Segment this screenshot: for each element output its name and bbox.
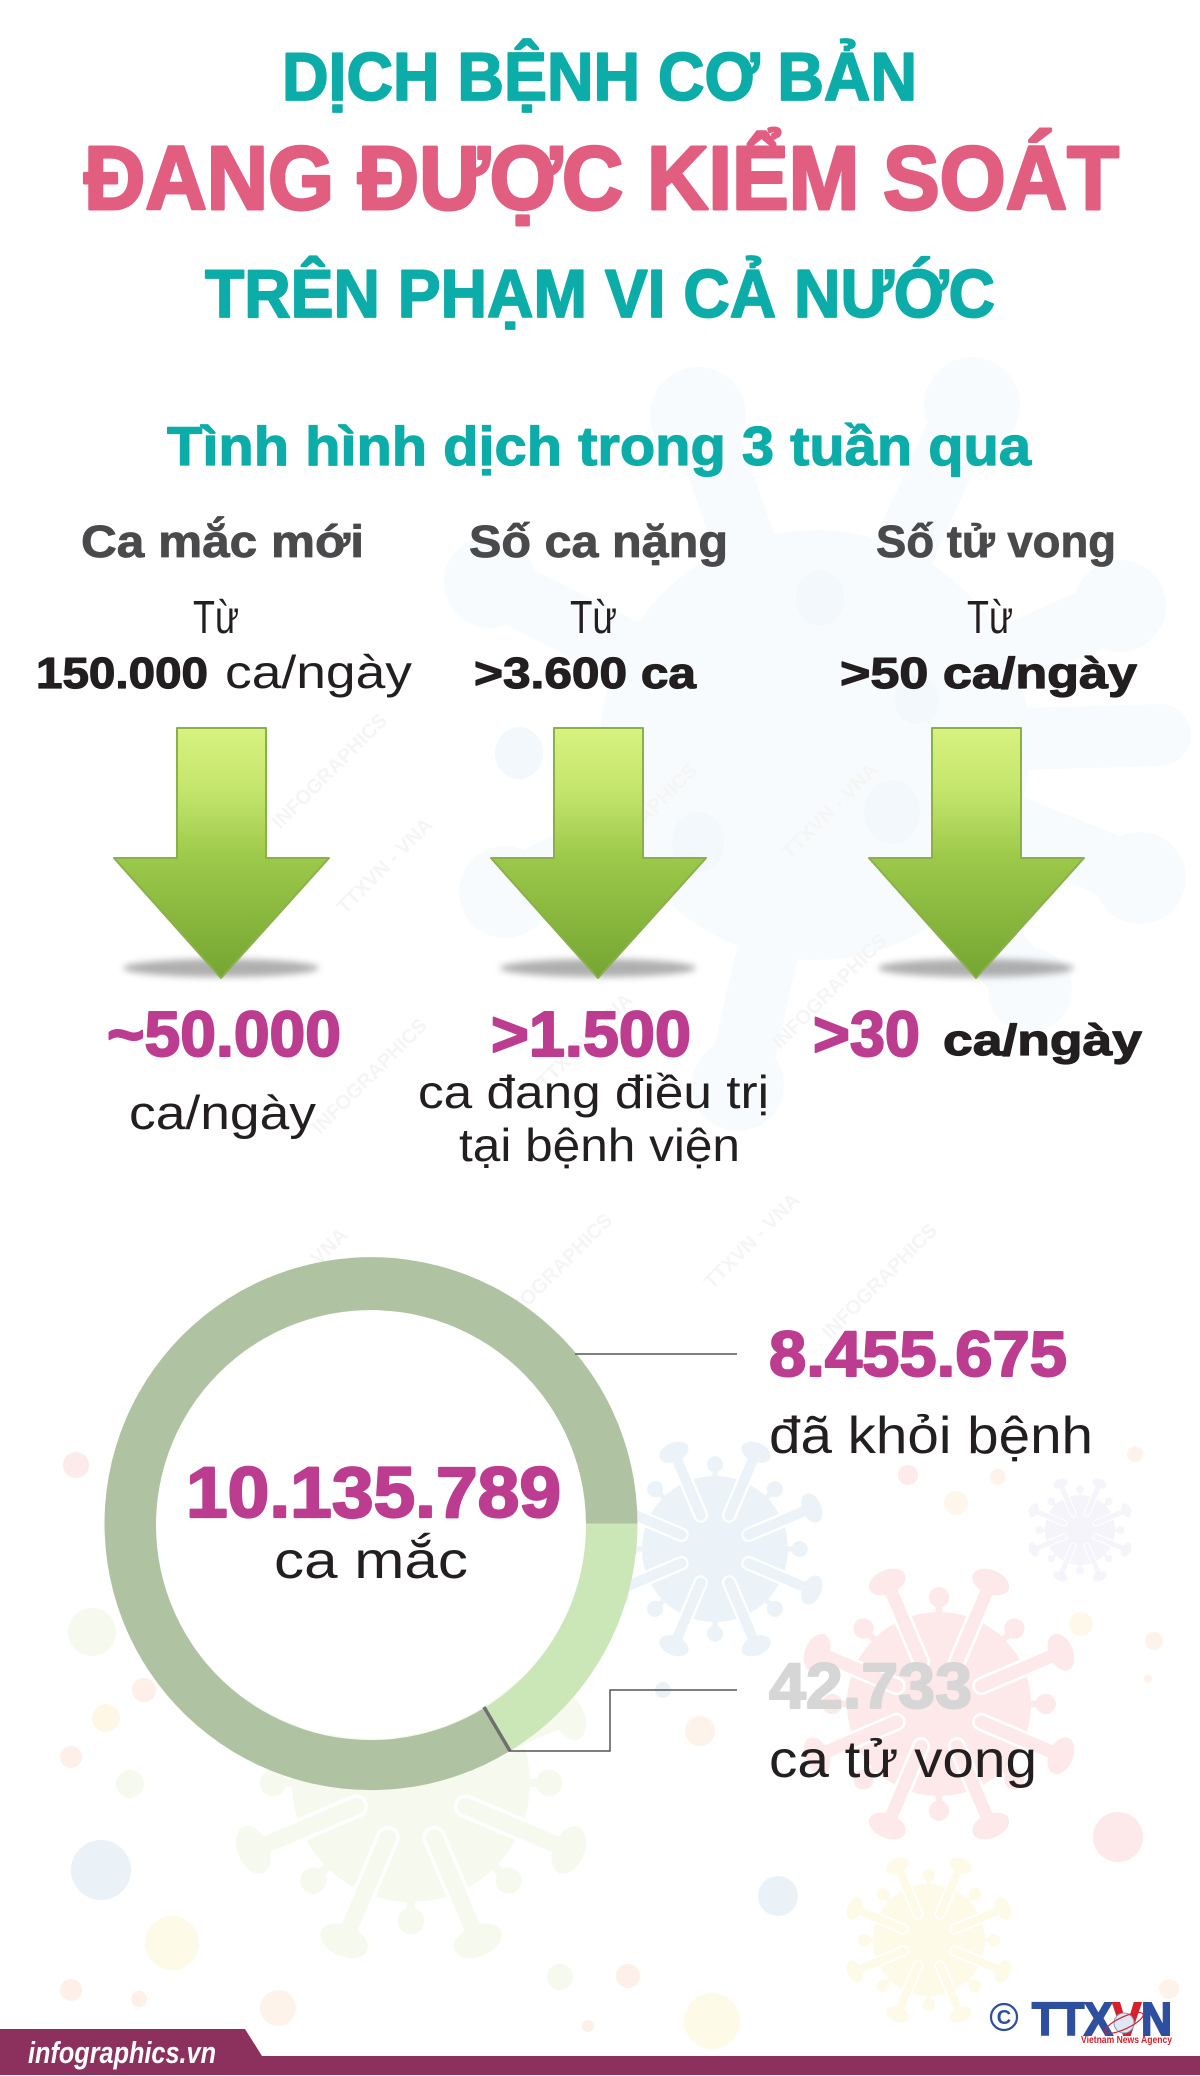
arrow down [869, 728, 1084, 978]
watermarks: TTXVN - VNA [700, 1189, 804, 1294]
watermarks: TTXVN - VNA [248, 1224, 352, 1329]
result description [418, 1066, 769, 1171]
total label: ca mắc [274, 1532, 468, 1590]
result value: >1.500 [491, 998, 691, 1070]
heading: Ca mắc mới [81, 516, 364, 567]
background: virus illustrations and dots [60, 1438, 1179, 2049]
from label: Từ [570, 591, 617, 643]
from value: ca/ngày [225, 646, 412, 698]
column: severe cases [418, 516, 769, 1171]
deaths value: 42.733 [769, 1650, 972, 1722]
from value: >3.600 ca [474, 649, 697, 698]
watermarks: INFOGRAPHICS [493, 1210, 617, 1334]
callout connector: deaths [509, 1690, 737, 1751]
icon: globe [1102, 2009, 1146, 2037]
footer site name: infographics.vn [28, 2035, 216, 2070]
result unit: ca/ngày [943, 1016, 1143, 1065]
from value: >50 ca/ngày [840, 649, 1138, 698]
footer bar [0, 2029, 1200, 2075]
watermarks: TTXVN - VNA [333, 814, 437, 919]
watermarks: INFOGRAPHICS [768, 930, 892, 1054]
arrow down [491, 728, 706, 978]
icon: copyright: C [997, 2007, 1011, 2029]
subtitle: Tình hình dịch trong 3 tuần qua [167, 415, 1031, 477]
result value: ~50.000 [107, 998, 341, 1070]
icon: copyright [991, 2004, 1017, 2030]
logo wordmark: TTXVN [1032, 1993, 1172, 2045]
donut chart [105, 1257, 638, 1790]
recovered label: đã khỏi bệnh [769, 1407, 1093, 1465]
heading: Số tử vong [876, 516, 1116, 567]
callout: recovered [769, 1318, 1093, 1465]
from value: 150.000 [36, 649, 208, 698]
recovered value: 8.455.675 [769, 1318, 1067, 1390]
segment: remaining cases [484, 1524, 638, 1751]
segment: recovered [105, 1257, 638, 1790]
total value: 10.135.789 [186, 1454, 561, 1533]
result description: tại bệnh viện [459, 1119, 740, 1171]
result description: ca đang điều trị [418, 1066, 769, 1118]
deaths label: ca tử vong [769, 1731, 1037, 1789]
title line 3: TRÊN PHẠM VI CẢ NƯỚC [205, 255, 995, 332]
watermarks: INFOGRAPHICS [308, 1015, 432, 1139]
from label: Từ [193, 591, 239, 643]
watermarks: INFOGRAPHICS [818, 1220, 942, 1344]
result value: >30 [813, 998, 920, 1070]
watermarks [248, 710, 942, 1344]
heading: Số ca nặng [469, 516, 728, 567]
watermarks: INFOGRAPHICS [268, 710, 392, 834]
title line 2: ĐANG ĐƯỢC KIỂM SOÁT [84, 127, 1119, 229]
result unit: ca/ngày [129, 1086, 317, 1139]
column: deaths [813, 516, 1143, 1070]
title [84, 38, 1119, 332]
from label: Từ [967, 591, 1013, 643]
segment: deaths sliver [484, 1707, 510, 1751]
title line 1: DỊCH BỆNH CƠ BẢN [282, 38, 917, 115]
column: new cases [36, 516, 412, 1139]
arrow down [114, 728, 329, 978]
logo tagline: Vietnam News Agency [1081, 2034, 1172, 2046]
background: large pale virus [444, 357, 1186, 1131]
from value [36, 646, 412, 698]
callout connector: recovered [575, 1353, 737, 1355]
logo: TTXVN [991, 1993, 1172, 2046]
callout: deaths [769, 1650, 1037, 1789]
watermarks: TTXVN - VNA [533, 989, 637, 1094]
watermarks: INFOGRAPHICS [578, 760, 702, 884]
watermarks: TTXVN - VNA [778, 759, 882, 864]
